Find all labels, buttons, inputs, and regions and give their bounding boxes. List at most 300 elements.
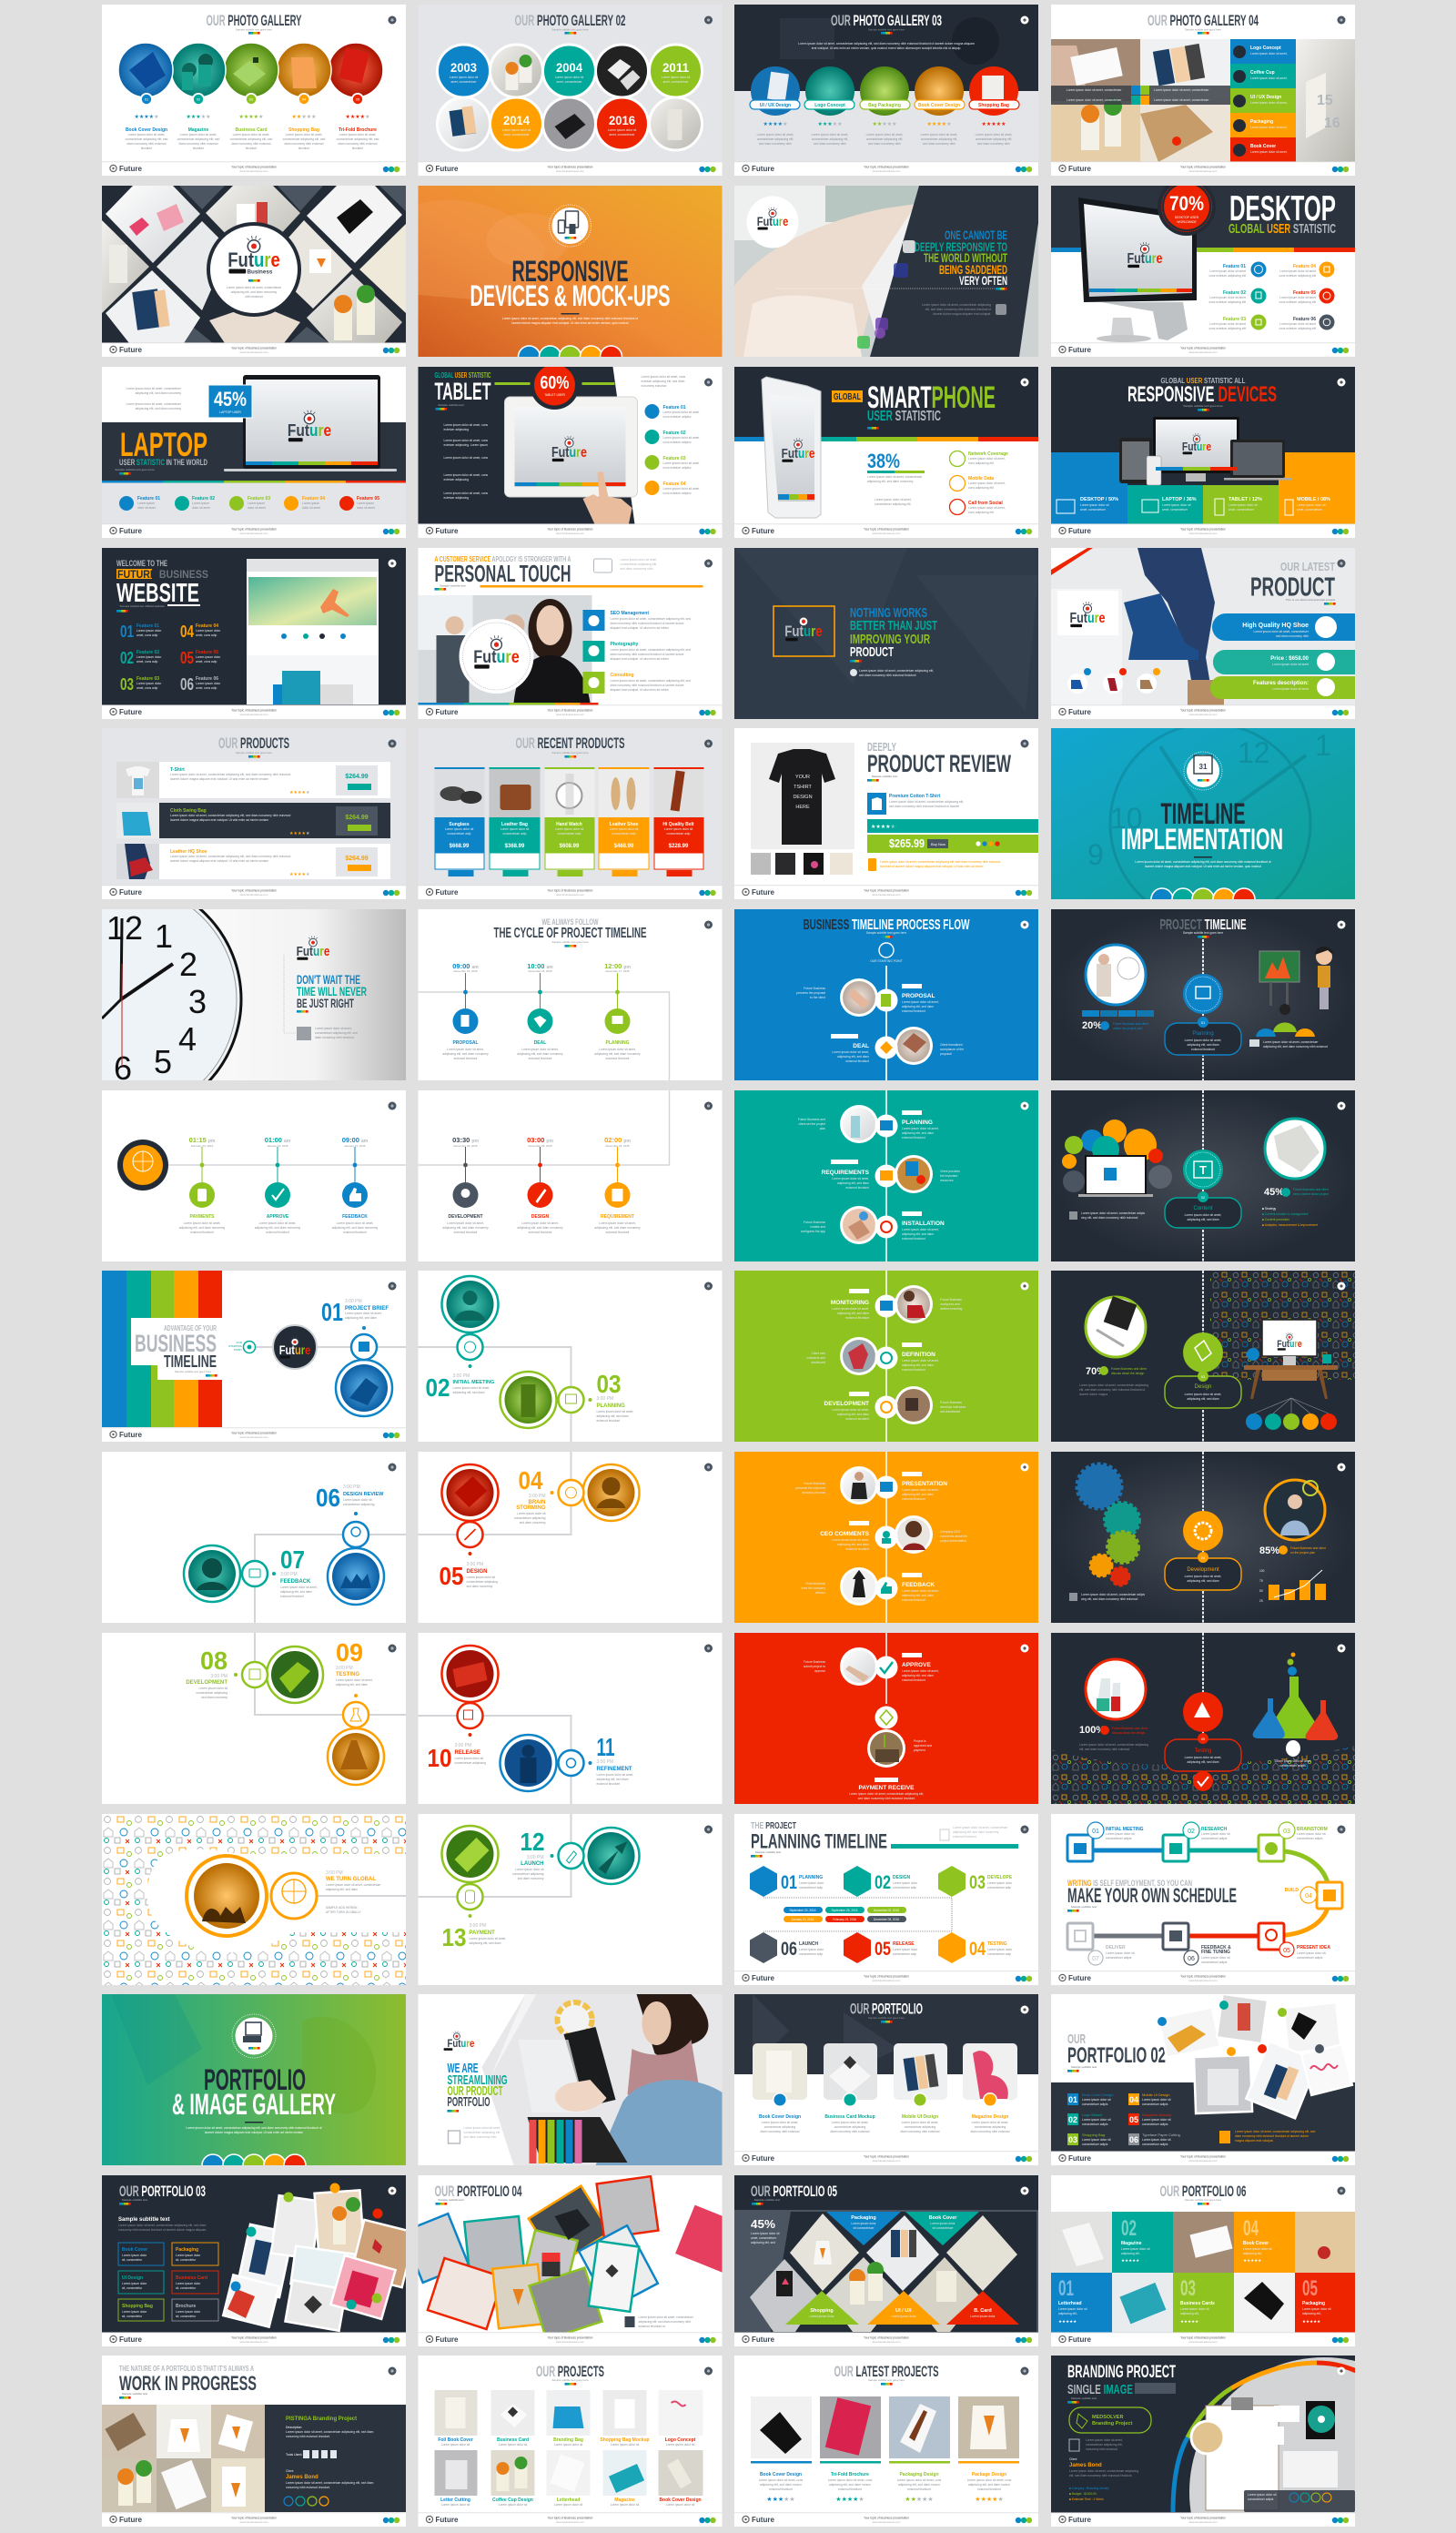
colour and photo grid: [1051, 2212, 1355, 2333]
captions and ratings: euismod tincidunt: [907, 2487, 931, 2491]
panel: timeline implementation cover: [1051, 724, 1355, 924]
left points: Lorem ipsum dolor sit amet, cons: [444, 491, 488, 495]
labels: Lorem ipsum dolor: [891, 2315, 917, 2318]
statement: STREAMLINING: [448, 2072, 508, 2088]
title: [118, 2183, 207, 2232]
photo circle: [1086, 945, 1146, 1005]
times and labels: PAYMENTS: [190, 1214, 215, 1220]
step 09: 3:00 PM: [336, 1666, 353, 1671]
caption: Lorem ipsum dolor sit amet, consectetuer: [326, 1883, 381, 1887]
step 10: [428, 1646, 499, 1772]
feature list: Feature 03: [1223, 317, 1246, 322]
footer: Future: [1068, 165, 1091, 173]
hexagon steps: RELEASE: [893, 1941, 915, 1947]
heading card: Sample subtitle text goes here: [175, 1370, 212, 1373]
presenter illustration: [1256, 947, 1333, 1037]
heading: Sample subtitle text goes here: [115, 468, 155, 471]
step 02: INITIAL MEETING: [453, 1380, 494, 1385]
grid labels: adipiscing elit,: [1058, 2312, 1077, 2315]
step 07: 07: [280, 1545, 305, 1574]
step: approve: [804, 1647, 939, 1686]
number badges and ratings: 01: [145, 96, 149, 102]
38% stat: Lorem ipsum dolor sit amet, consectetuer: [867, 475, 923, 479]
panel: laptop user statistic: [102, 367, 406, 538]
heading: DEEPLY: [867, 740, 896, 754]
intro: euismod tincidunt: [953, 1835, 976, 1839]
left points: ectetuer adipiscing: [444, 478, 469, 481]
times and labels: adipiscing elit, sed diam nonummy: [442, 1052, 489, 1056]
panel: advantage of your business timeline: [102, 1271, 406, 1442]
stats: Lorem ipsum dolor sit amet, consectetuer adipiscing: [1079, 1383, 1148, 1387]
title: THE CYCLE OF PROJECT TIMELINE: [493, 926, 647, 941]
step labels: Lorem ipsum dolor sit,: [1297, 1951, 1327, 1955]
footer: [419, 2512, 723, 2527]
step: definition: dashboard: [811, 1361, 825, 1364]
photo details: [109, 199, 375, 340]
feature labels: Lorem ipsum dolor: [136, 629, 162, 633]
times and labels: PROPOSAL: [452, 1040, 479, 1046]
ratings and descriptions: consectetuer adipiscing elit,: [921, 137, 957, 141]
step 04: BRAIN: [528, 1500, 546, 1505]
title: Sample subtitle text goes here: [551, 940, 589, 944]
footer: Future: [435, 708, 459, 716]
number badges and ratings: 05: [356, 96, 360, 102]
statement: WE ARE: [448, 2061, 479, 2076]
footer: [102, 885, 406, 899]
note: euismod tincidunt ut: [639, 2325, 665, 2328]
times and labels: November 18, 2015: [605, 1144, 630, 1148]
title: [803, 917, 970, 938]
ratings and descriptions: Lorem ipsum dolor sit amet,: [866, 133, 903, 137]
numbered items: Typeface Paper Cutting: [1142, 2133, 1180, 2137]
step 07: FEEDBACK: [280, 1579, 311, 1585]
photo details: [513, 2209, 619, 2305]
quote: THE WORLD WITHOUT: [924, 250, 1007, 265]
heading: PRODUCT: [1250, 573, 1335, 603]
wall clock: 5: [154, 1043, 172, 1080]
speech icon and intro: Lorem ipsum dolor sit amet,: [621, 558, 657, 562]
title: Sample subtitle text goes here: [1185, 2198, 1222, 2202]
monitor: [1078, 198, 1197, 342]
step 01: PROJECT BRIEF: [345, 1306, 389, 1312]
times and labels: euismod tincidunt: [454, 1057, 477, 1060]
step 07: euismod tincidunt: [280, 1595, 304, 1598]
rating and price bars: [867, 819, 1038, 853]
footer: www.futurebusiness.com: [1189, 1979, 1218, 1982]
left points: Lorem ipsum dolor sit amet, cons: [444, 423, 488, 427]
milestone circle and pill: adipiscing elit, sed diam: [1187, 1579, 1219, 1583]
step 02: adipiscing elit, sed diam: [453, 1391, 485, 1394]
starting point: [870, 943, 903, 1080]
footer: www.futurebusiness.com: [1189, 2340, 1218, 2344]
times and labels: February 22, 2016: [191, 1144, 214, 1148]
title: Sample subtitle text goes here: [551, 2378, 589, 2382]
product thumbnails: [1067, 668, 1160, 694]
step labels: Lorem ipsum dolor sit,: [1201, 1956, 1231, 1960]
panel: cycle of project timeline: [419, 909, 723, 1080]
stats: define the project plan: [1113, 1027, 1143, 1030]
footer: [1051, 161, 1355, 173]
step 08: 08: [200, 1646, 228, 1675]
dashed spine: [1202, 1271, 1204, 1442]
step 09: TESTING: [336, 1672, 359, 1677]
times and labels: adipiscing elit, sed diam nonummy: [179, 1226, 226, 1230]
heading: FUTURE BUSINESS: [117, 568, 208, 581]
numbered colour list: Lorem ipsum dolor sit amet,: [1250, 126, 1288, 129]
numbered items: consectetuer adipis: [1142, 2143, 1168, 2146]
step: requirements: REQUIREMENTS: [822, 1170, 870, 1176]
captions: diam nonummy nibh euismod: [284, 142, 324, 146]
starting point: STARTING: [228, 1344, 243, 1348]
times and labels: adipiscing elit, sed diam nonummy: [517, 1226, 563, 1230]
ratings and descriptions: consectetuer adipiscing elit,: [812, 137, 848, 141]
step 05: 3:00 PM: [466, 1562, 483, 1567]
ratings and descriptions: consectetuer adipiscing elit,: [976, 137, 1012, 141]
ratings and descriptions: consectetuer adipiscing elit,: [866, 137, 903, 141]
step: proposal: adipiscing elit, sed diam: [902, 1005, 934, 1008]
38% stat: [867, 450, 925, 506]
labels: sit consectetuer: [932, 2226, 954, 2230]
description: ■ Estimate Time : 1 Week: [1069, 2498, 1104, 2501]
title: Sample subtitle text goes here: [551, 751, 589, 755]
statement: DON'T WAIT THE: [297, 972, 360, 987]
wall clock: [1, 879, 241, 1120]
captions and ratings: [759, 2472, 1012, 2503]
38% stat: Lorem ipsum dolor sit amet,: [875, 498, 912, 502]
times and labels: euismod tincidunt: [606, 1057, 629, 1060]
heading: [1067, 1879, 1237, 1912]
step: approve: Future Business: [804, 1660, 825, 1664]
product labels: Lorem ipsum dolor sit: [555, 827, 583, 831]
step: planning: plan: [820, 1127, 825, 1130]
photo details: [450, 55, 682, 140]
box labels: Lorem ipsum dolor: [176, 2282, 201, 2285]
title: WE ALWAYS FOLLOW: [542, 917, 599, 927]
outlined boxes: [118, 2243, 218, 2321]
wall clock: 12: [106, 909, 143, 947]
ratings and descriptions: sed diam nonummy nibh: [814, 142, 846, 146]
feature list: Lorem ipsum dolor sit amet: [1209, 296, 1246, 299]
panel: project timeline development: [1051, 1452, 1355, 1623]
box labels: sit, consectetur: [176, 2315, 197, 2318]
step 04: sed diam nonummy: [520, 1521, 546, 1525]
footer: www.futurebusiness.com: [556, 2520, 585, 2524]
year labels: Lorem ipsum dolor sit: [662, 76, 690, 79]
feature labels: amet, cons adip: [196, 660, 217, 664]
dashed spine: [1202, 1633, 1204, 1760]
device group: [1119, 417, 1291, 485]
footer: Future: [119, 2335, 142, 2344]
70% badge: 70%: [1169, 192, 1204, 215]
left points: ectetuer adipiscing: [444, 428, 469, 431]
times and labels: [442, 1136, 641, 1234]
timeline track: [419, 1452, 571, 1535]
starting point: [228, 1341, 255, 1353]
title: [493, 917, 647, 947]
logo circle: Business: [248, 269, 273, 275]
panel: our latest projects: [734, 2356, 1038, 2527]
numbered features: 04: [180, 623, 194, 641]
intro: adipiscing elit, sed diam nonummy: [953, 1830, 999, 1834]
heading: Sample subtitle text: [122, 2392, 147, 2396]
title: OUR PHOTO GALLERY: [206, 12, 302, 29]
description: laoreet dolore magna aliquam erat volutpat. Ut wisi enim ad minim veniam: [205, 2131, 303, 2134]
ratings and descriptions: ★★★★★: [818, 121, 842, 127]
footer: Your topic of Business presentation: [548, 166, 593, 169]
stats list: Future Business and client: [1293, 1188, 1329, 1191]
footer: Your topic of Business presentation: [1180, 346, 1226, 350]
step squares: [1067, 1835, 1342, 1950]
hexagon steps: consectetuer adip: [799, 1886, 823, 1890]
numbered items: consectetuer adipis: [1142, 2102, 1168, 2106]
features: Lorem ipsum: [357, 502, 374, 505]
feature text: cons adipiscing elit: [968, 461, 994, 465]
product labels: Lorem ipsum dolor sit: [445, 827, 473, 831]
device statistics: LAPTOP / 36%: [1162, 497, 1197, 502]
grid labels: [1058, 2216, 1331, 2324]
times and labels: Lorem ipsum dolor sit amet,: [521, 1221, 559, 1225]
footer: Your topic of Business presentation: [864, 528, 909, 532]
milestone circle and pill: 05: [1201, 1737, 1206, 1741]
feature list: Feature 01: [1223, 264, 1246, 269]
card captions: Lorem ipsum dolor sit amet,: [832, 2121, 868, 2124]
product labels: Lorem ipsum dolor sit: [664, 827, 693, 831]
panel: make your own schedule: [1051, 1814, 1355, 1985]
times and labels: [442, 962, 641, 1060]
card captions: Lorem ipsum dolor sit amet,: [902, 2121, 938, 2124]
diamond lattice: [750, 2212, 1036, 2332]
device statistics: Lorem ipsum dolor sit: [1297, 503, 1326, 507]
captions: tincidunt: [246, 147, 257, 150]
number badges and ratings: ★★★★★: [135, 114, 158, 120]
panel: diamond photo mosaic with logo: [102, 186, 406, 357]
title: [515, 15, 626, 35]
phone: [762, 377, 821, 518]
times and labels: November 16, 2015: [528, 969, 552, 973]
step: requirements: euismod tincidunt: [845, 1186, 869, 1190]
labels: B. Card: [974, 2308, 992, 2314]
photo circles with pill labels: Shopping Bag: [978, 103, 1009, 108]
stats: discuss about the design: [1111, 1372, 1144, 1375]
footer: Future: [752, 2154, 774, 2163]
description: Lorem ipsum dolor sit amet, consectetuer adipiscing elit, sed diam nonummy nibh euismod tincidunt ut: [502, 317, 638, 320]
captions and ratings: Tri-Fold Brochure: [831, 2472, 869, 2477]
hexagon steps: Lorem ipsum dolor: [987, 1948, 1013, 1951]
icon circle: 31: [1199, 763, 1208, 771]
colour stripes: [102, 1271, 222, 1427]
left points: ectetuer adipiscing: [444, 496, 469, 500]
title: Sample subtitle text: [122, 2198, 147, 2202]
colour band: [1051, 248, 1355, 252]
step 13: adipiscing elit, sed diam: [470, 1941, 501, 1945]
shipping note: tincidunt ut laoreet dolore magna aliquam erat volutpat. Ut wisi enim ad minim: [880, 865, 984, 868]
timeline track: [255, 1633, 406, 1715]
heading: IMPLEMENTATION: [1121, 823, 1283, 856]
times and labels: DEVELOPMENT: [448, 1214, 483, 1220]
stats: laoreet dolore magna: [1079, 1393, 1107, 1396]
step labels: 06: [1188, 1956, 1195, 1962]
photo circle: [1086, 1659, 1146, 1719]
times and labels: Lorem ipsum dolor sit amet,: [447, 1048, 484, 1051]
footer: Future: [119, 346, 142, 354]
clipboard and stationery: [1191, 2397, 1355, 2512]
milestone circle and pill: 03: [1201, 1374, 1206, 1379]
features: Feature 01: [137, 496, 160, 502]
footer: Future: [119, 165, 142, 173]
milestone circle and pill: Planning: [1192, 1031, 1214, 1037]
captions and ratings: Packaging Design: [899, 2472, 939, 2477]
step: requirements: resources: [940, 1179, 954, 1182]
photo mosaic: 15: [1317, 93, 1333, 108]
card captions: Mobile UI Design: [902, 2114, 938, 2120]
laptop: [224, 375, 397, 471]
description: sed diam nonummy nibh euismod tincidunt: [859, 674, 916, 677]
step: presentation: [796, 1466, 947, 1505]
numbered items: Logo Sketch: [1082, 2113, 1102, 2117]
captions and ratings: Lorem ipsum dolor sit amet, cons: [897, 2478, 942, 2482]
captions: consectetuer adipiscing elit, sed: [337, 137, 379, 141]
step 03: adipiscing elit, sed diam: [597, 1414, 629, 1418]
step 09: adipiscing elit, sed diam: [336, 1683, 368, 1687]
45% box: LAPTOP USER: [219, 410, 241, 414]
wall clock: 2: [179, 946, 197, 983]
feature text: cons adipiscing elit: [968, 486, 994, 490]
t-shirt photo: YOUR: [795, 775, 810, 780]
step: definition: Client sets: [812, 1352, 825, 1355]
captions and ratings: Lorem ipsum dolor sit amet, cons: [759, 2478, 804, 2482]
number badges and ratings: ★★★★★: [187, 114, 210, 120]
heading: DESKTOP: [1229, 189, 1336, 228]
five role circles: [1246, 1398, 1337, 1430]
stats and bar chart: 25: [1259, 1599, 1263, 1603]
grid labels: adipiscing elit,: [1243, 2252, 1262, 2255]
heading: USER STATISTIC: [867, 409, 941, 424]
footer: [1051, 2332, 1355, 2346]
captions: diam nonummy nibh euismod: [126, 142, 167, 146]
heading: [1121, 797, 1283, 856]
feature list: Feature 05: [1293, 290, 1316, 296]
captions: Book Cover Design: [126, 127, 167, 133]
statement: IMPROVING YOUR: [850, 632, 930, 647]
footer: [1051, 342, 1355, 357]
phone app icons: [857, 240, 915, 349]
captions and ratings: ★★★★★: [905, 2496, 934, 2503]
step labels: consectetuer adipis: [1106, 1837, 1132, 1840]
features: Lorem ipsum dolor sit amet: [662, 436, 699, 440]
features: Feature 03: [662, 456, 686, 461]
step 04: [514, 1464, 639, 1525]
note: [1069, 1593, 1145, 1601]
milestone circle and pill: [1165, 1511, 1241, 1590]
card captions: Shopping Bag Mockup: [600, 2437, 650, 2443]
step 11: 11: [597, 1733, 615, 1761]
product labels: consectetuer adip: [502, 832, 527, 836]
step: presentation: PRESENTATION: [902, 1481, 947, 1487]
panel: project timeline testing: [1051, 1633, 1355, 1804]
panel: project timeline content: [1051, 1090, 1355, 1261]
step 10: 3:00 PM: [455, 1743, 471, 1748]
photo circle: [1086, 1296, 1146, 1357]
phone: Future: [782, 447, 814, 461]
step: ceo comments: euismod tincidunt: [845, 1547, 869, 1551]
step 10: consectetuer adipiscing: [455, 1761, 486, 1765]
box labels: Business Card: [176, 2275, 207, 2281]
step: deal: Client formalized: [940, 1043, 963, 1047]
title: OUR: [1067, 2031, 1086, 2047]
product photos: [435, 767, 704, 817]
milestone circle and pill: Lorem ipsum dolor sit amet,: [1185, 1213, 1221, 1217]
footer: Future: [435, 527, 459, 535]
footer: [102, 1427, 406, 1442]
footer: Your topic of Business presentation: [864, 1975, 909, 1979]
number badges and ratings: 02: [197, 96, 201, 102]
step 12: 12: [521, 1828, 544, 1856]
quote: ONE CANNOT BE: [945, 228, 1007, 242]
step 12: [512, 1828, 639, 1884]
features: Feature 04: [662, 481, 686, 487]
step 01: adipiscing elit, sed diam: [345, 1316, 377, 1320]
footer: www.futurebusiness.com: [556, 169, 585, 173]
feature text: cons adipiscing elit: [968, 511, 994, 514]
footer: Your topic of Business presentation: [864, 2335, 909, 2339]
product pills: Lorem ipsum dolor sit amet: [1272, 663, 1309, 666]
panel: our portfolio 02: [1051, 1994, 1355, 2165]
numbered items: 03: [1068, 2135, 1077, 2144]
captions and ratings: adipiscing elit, sed diam nonum: [760, 2483, 802, 2487]
step: presentation: Future Business: [804, 1482, 825, 1485]
product card: cloth swing bag: $264.99: [345, 815, 369, 821]
note: Lorem ipsum dolor sit amet,: [1275, 1759, 1311, 1763]
labels: UI / UX: [895, 2308, 912, 2314]
photo circles with pill labels: Logo Concept: [814, 103, 845, 108]
feature labels: Feature 06: [196, 676, 218, 682]
number badges and ratings: ★★★★★: [346, 114, 369, 120]
step 08: consectetuer adipiscing: [197, 1691, 228, 1695]
side text: Lorem ipsum dolor sit amet, consectetuer: [126, 402, 182, 406]
step 10: RELEASE: [455, 1750, 480, 1756]
product card: cloth swing bag: Cloth Swing Bag: [170, 808, 207, 814]
statement: [297, 972, 367, 1013]
quote: BEING SADDENED: [939, 262, 1007, 277]
box labels: [122, 2247, 207, 2318]
faded clock: 1: [1315, 729, 1331, 762]
heading: SMARTPHONE: [867, 380, 996, 415]
footer: www.futurebusiness.com: [556, 532, 585, 535]
heading: PORTFOLIO: [204, 2063, 306, 2096]
dark diagonal panel: [870, 186, 1038, 357]
ratings and descriptions: ★★★★★: [873, 121, 896, 127]
card captions: consectetuer adipiscing: [834, 2125, 865, 2129]
footer: Your topic of Business presentation: [1180, 2335, 1226, 2339]
device statistics: amet, consectetuer: [1297, 508, 1323, 512]
card captions: Lorem ipsum dolor sit amet,: [762, 2121, 798, 2124]
captions and ratings: adipiscing elit, sed diam nonum: [898, 2483, 940, 2487]
step: monitoring: euismod tincidunt: [845, 1316, 869, 1320]
logo badge: [746, 197, 799, 248]
footer: [102, 342, 406, 357]
numbered items: Shopping Bag: [1082, 2133, 1105, 2137]
logo: [444, 2031, 475, 2051]
45% callout: [751, 2217, 780, 2244]
times and labels: euismod tincidunt: [529, 1231, 551, 1234]
title: OUR LATEST PROJECTS: [834, 2363, 939, 2380]
step: development: adipiscing elit, sed diam: [837, 1413, 869, 1416]
logo circle: Future: [473, 647, 520, 667]
footer: Future: [752, 2516, 774, 2524]
tilted cards: [223, 2190, 416, 2331]
step 06: DESIGN REVIEW: [343, 1492, 384, 1497]
step: installation: configures the app: [801, 1230, 825, 1233]
